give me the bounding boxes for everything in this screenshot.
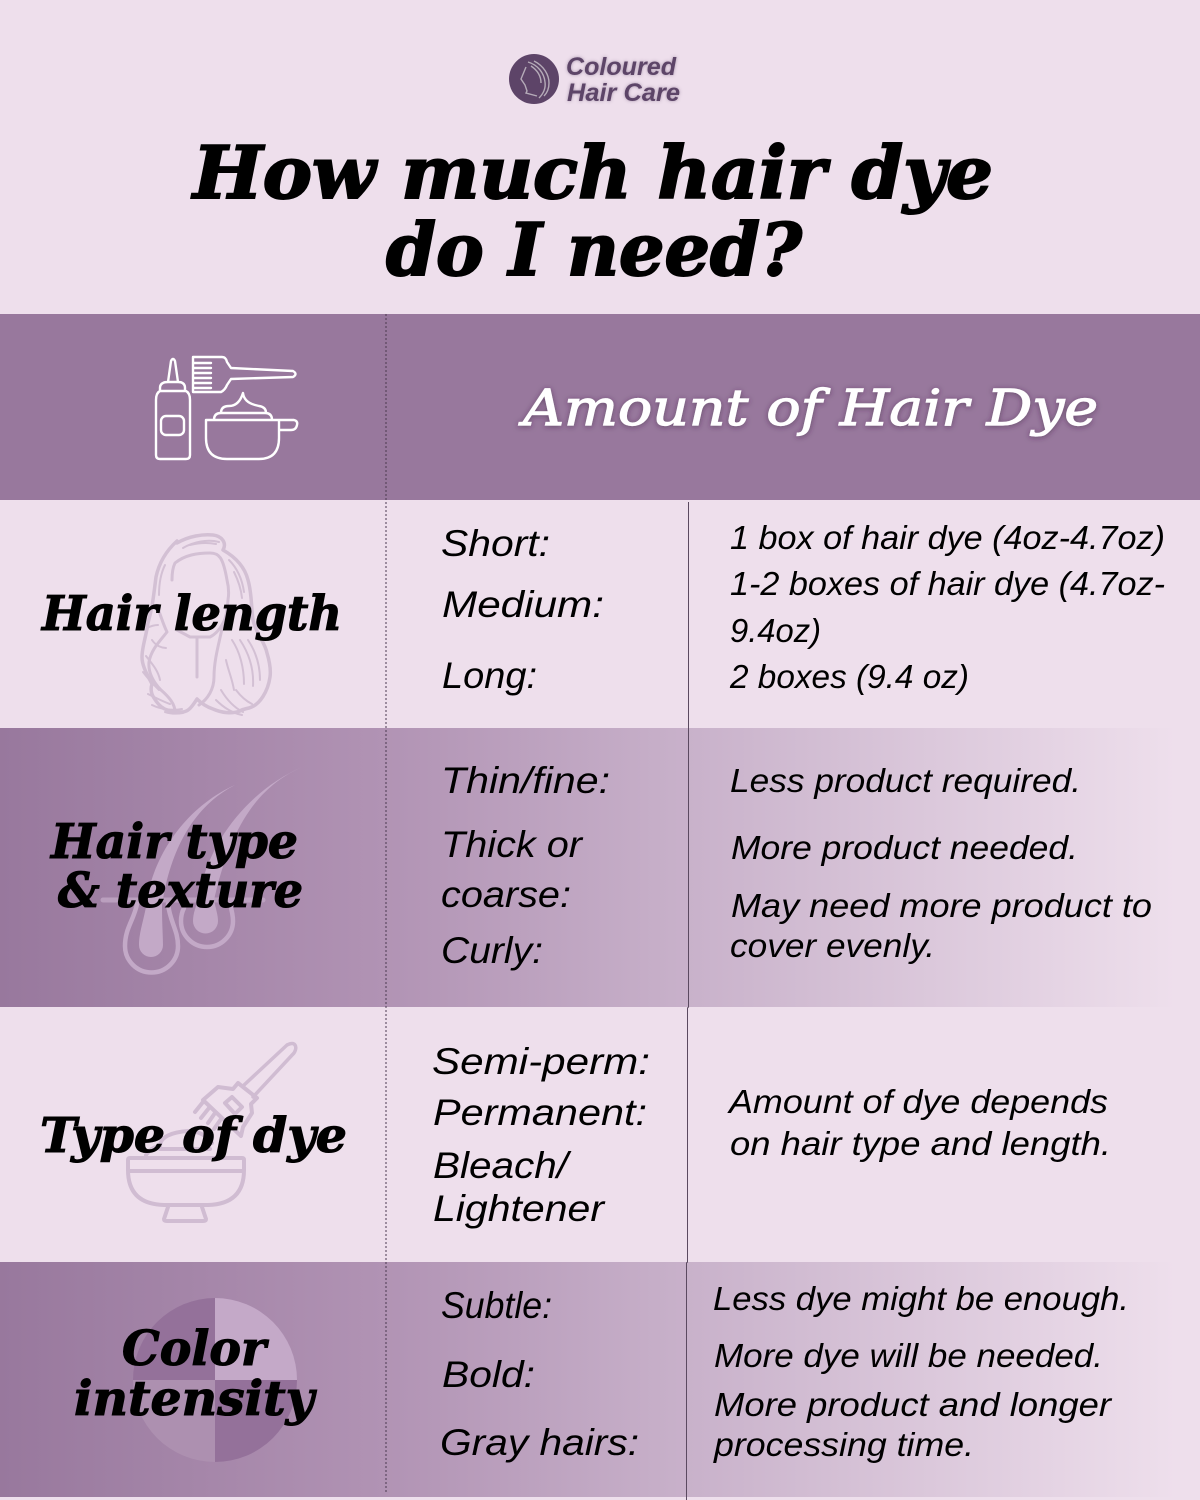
text block: dye type amounts: Amount of dye depends xyxy=(727,1083,1108,1120)
text block: hair length amounts: 1 box of hair dye (4oz-4.7oz) xyxy=(730,519,1165,556)
heading: color intensity: intensity xyxy=(74,1371,317,1427)
heading: hair length: Hair length xyxy=(40,586,342,642)
heading: color intensity xyxy=(74,1321,317,1427)
text block: color intensity amounts: Less dye might be enough. xyxy=(713,1280,1129,1317)
heading: color intensity: Color xyxy=(122,1321,270,1377)
text block: hair type amounts: cover evenly. xyxy=(730,927,935,964)
text block: hair length amounts: 2 boxes (9.4 oz) xyxy=(729,658,969,695)
text block: dye type options: Semi-perm: xyxy=(432,1041,650,1082)
text block: hair length options: Medium: xyxy=(442,584,604,625)
text block: color intensity options: Bold: xyxy=(442,1354,535,1395)
text block: color intensity options: Gray hairs: xyxy=(440,1422,639,1463)
icon: color wheel xyxy=(133,1298,297,1462)
logo: Coloured Hair Care xyxy=(509,53,680,107)
column dividers xyxy=(386,314,688,1500)
logo: Coloured Hair Care: Hair Care xyxy=(567,79,680,107)
heading: hair type and texture: Hair type xyxy=(49,814,298,870)
text block: hair type amounts: May need more product to xyxy=(731,887,1152,924)
text block: hair length amounts xyxy=(729,519,1165,695)
text block: dye type amounts xyxy=(727,1083,1111,1162)
text block: color intensity amounts xyxy=(713,1280,1129,1463)
icon: hair follicles xyxy=(103,767,302,972)
text block: dye type options: Bleach/ xyxy=(433,1145,572,1186)
text block: hair type options: Thin/fine: xyxy=(441,760,610,801)
text block: hair length options xyxy=(441,523,604,696)
text block: hair type options: Thick or xyxy=(441,824,584,865)
text block: hair type amounts: Less product required. xyxy=(730,762,1081,799)
panel: hair type row background xyxy=(0,728,1200,1007)
text block: hair type options xyxy=(441,760,610,971)
text block: hair length amounts: 9.4oz) xyxy=(730,612,821,649)
icon: dye bowl and brush xyxy=(128,1044,296,1221)
text block: color intensity amounts: processing time. xyxy=(713,1426,974,1463)
icon: long hair woman xyxy=(142,535,270,715)
heading: hair type and texture: & texture xyxy=(58,863,303,919)
title: do I need? xyxy=(386,207,803,292)
title: How much hair dye xyxy=(191,130,993,215)
text block: hair length amounts: 1-2 boxes of hair dye (4.7oz- xyxy=(730,565,1165,602)
panel: color intensity row background xyxy=(0,1262,1200,1497)
panel: header band xyxy=(0,314,1200,500)
text block: color intensity amounts: More dye will be needed. xyxy=(714,1337,1103,1374)
text block: dye type amounts: on hair type and length. xyxy=(730,1125,1111,1162)
text block: hair type options: Curly: xyxy=(441,930,543,971)
logo: Coloured Hair Care: Coloured xyxy=(566,53,677,81)
icon: hair dye kit xyxy=(156,357,297,459)
heading: amount of hair dye: Amount of Hair Dye xyxy=(518,379,1098,437)
text block: hair type amounts: More product needed. xyxy=(731,829,1078,866)
text block: color intensity options xyxy=(440,1285,639,1463)
heading: type of dye: Type of dye xyxy=(40,1108,347,1164)
text block: hair length options: Short: xyxy=(441,523,550,564)
text block: dye type options xyxy=(432,1041,650,1229)
text block: color intensity amounts: More product and longer xyxy=(714,1386,1113,1423)
text block: dye type options: Lightener xyxy=(433,1188,606,1229)
text block: color intensity options: Subtle: xyxy=(441,1285,552,1326)
heading: hair type and texture xyxy=(49,814,303,919)
text block: hair type options: coarse: xyxy=(441,874,571,915)
title xyxy=(191,130,993,292)
text block: dye type options: Permanent: xyxy=(433,1092,647,1133)
text block: hair length options: Long: xyxy=(442,655,537,696)
text block: hair type amounts xyxy=(730,762,1152,964)
